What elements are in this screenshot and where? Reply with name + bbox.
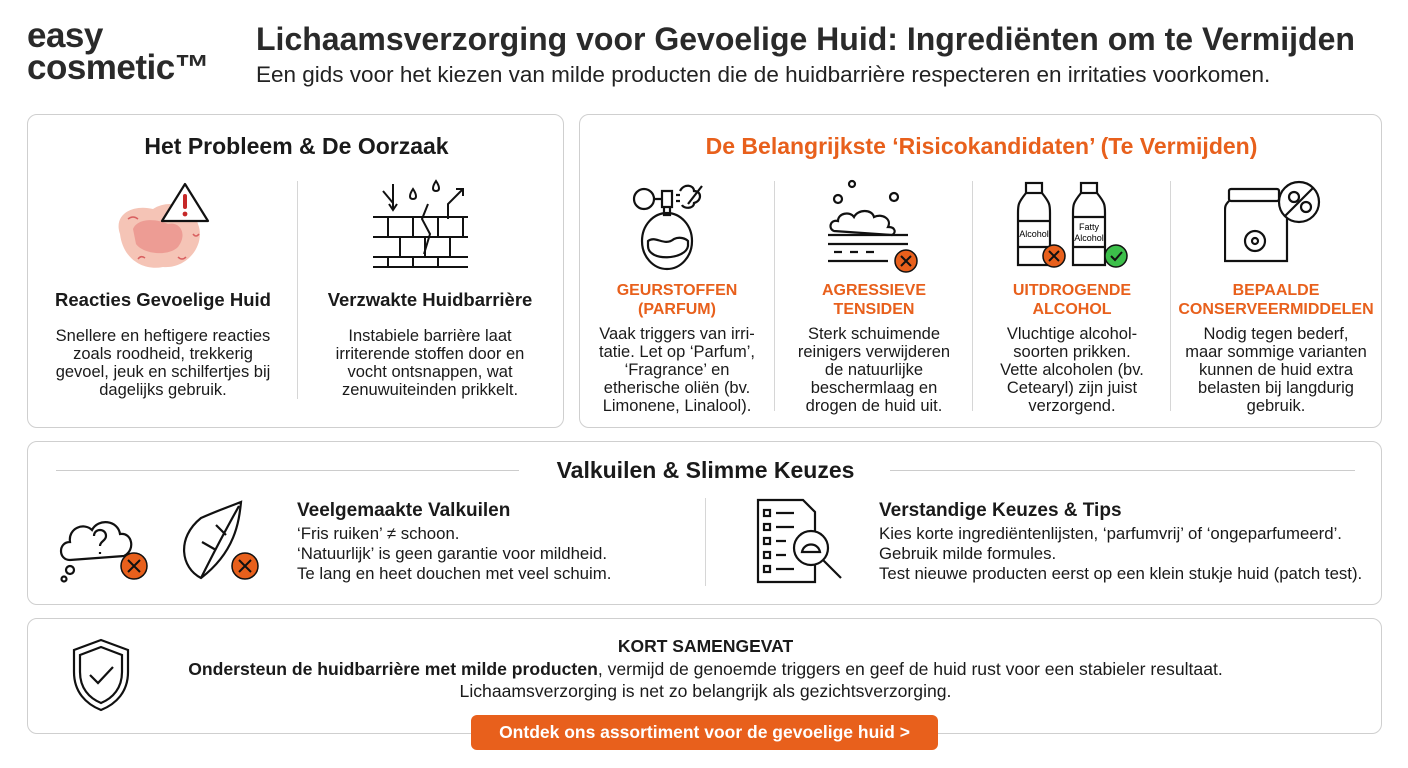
item: fragrance: (PARFUM) xyxy=(638,301,716,318)
item: alcohol: ALCOHOL xyxy=(1032,301,1112,318)
item: fragrance: Vaak triggers van irri-tatie. Let op ‘Parfum’, ‘Fragrance’ en etherische oliën (bv. Limonene, Linalool). xyxy=(599,325,755,415)
panel: pitfalls & choices xyxy=(27,441,1382,605)
icon: irritated skin xyxy=(118,182,210,268)
summary text: Lichaamsverzorging is net zo belangrijk als gezichtsverzorging. xyxy=(460,681,951,701)
icon: alcohol bottles: Alcohol xyxy=(1019,229,1049,239)
icons: pitfalls xyxy=(60,500,259,583)
item: barrier: Verzwakte Huidbarrière xyxy=(328,289,532,310)
item: surfactants xyxy=(798,282,950,415)
item: fragrance: GEURSTOFFEN xyxy=(617,282,737,299)
item: preservatives xyxy=(1178,282,1374,415)
logo: cosmetic™ xyxy=(27,48,209,87)
text: pitfalls: ‘Natuurlijk’ is geen garantie voor mildheid. xyxy=(297,544,607,563)
panel: problem & cause xyxy=(27,114,564,428)
icon: alcohol bottles: Fatty xyxy=(1079,222,1099,232)
icon: shield xyxy=(72,638,130,712)
summary text: Ondersteun de huidbarrière met milde producten, vermijd de genoemde triggers en geef de huid rust voor een stabieler resultaat. xyxy=(188,659,1223,679)
summary text: KORT SAMENGEVAT xyxy=(618,636,793,656)
text: pitfalls xyxy=(297,500,611,583)
item: preservatives: BEPAALDE xyxy=(1233,282,1319,299)
text: pitfalls: Veelgemaakte Valkuilen xyxy=(297,500,510,521)
logo xyxy=(27,16,209,87)
icon: preservatives xyxy=(1224,180,1320,262)
heading: Valkuilen & Slimme Keuzes xyxy=(557,457,854,483)
item: alcohol xyxy=(1000,282,1144,415)
text: tips xyxy=(879,500,1362,583)
item: barrier: Instabiele barrière laat irriterende stoffen door en vocht ontsnappen, wat zenuwuiteinden prikkelt. xyxy=(336,327,524,399)
summary text xyxy=(188,636,1223,701)
item: barrier xyxy=(328,289,532,399)
text: tips: Test nieuwe producten eerst op een klein stukje huid (patch test). xyxy=(879,564,1362,583)
icon: perfume xyxy=(632,184,703,270)
item: preservatives: CONSERVEERMIDDELEN xyxy=(1178,301,1374,318)
panel: summary xyxy=(27,618,1382,734)
icon: foam xyxy=(828,180,918,273)
title: Lichaamsverzorging voor Gevoelige Huid: Ingrediënten om te Vermijden xyxy=(256,21,1355,57)
heading: Het Probleem & De Oorzaak xyxy=(144,133,449,159)
item: surfactants: Sterk schuimende reinigers verwijderen de natuurlijke beschermlaag en drogen de huid uit. xyxy=(798,325,950,415)
item: fragrance xyxy=(599,282,755,415)
text: pitfalls: ‘Fris ruiken’ ≠ schoon. xyxy=(297,524,459,543)
item: reactions: Snellere en heftigere reacties zoals roodheid, trekkerig gevoel, jeuk en schilfertjes bij dagelijks gebruik. xyxy=(56,327,270,399)
heading: De Belangrijkste ‘Risicokandidaten’ (Te Vermijden) xyxy=(706,133,1257,159)
subtitle: Een gids voor het kiezen van milde producten die de huidbarrière respecteren en irritaties voorkomen. xyxy=(256,62,1270,87)
icon: checklist magnifier xyxy=(756,498,842,584)
button: call to action: Ontdek ons assortiment voor de gevoelige huid > xyxy=(499,722,910,742)
item: preservatives: Nodig tegen bederf, maar sommige varianten kunnen de huid extra belasten bij langdurig gebruik. xyxy=(1185,325,1367,415)
item: surfactants: TENSIDEN xyxy=(834,301,914,318)
icon: alcohol bottles: Alcohol xyxy=(1074,233,1104,243)
item: reactions: Reacties Gevoelige Huid xyxy=(55,289,271,310)
logo: easy xyxy=(27,16,103,55)
item: alcohol: UITDROGENDE xyxy=(1013,282,1131,299)
icon: alcohol bottles xyxy=(1016,182,1128,268)
text: tips: Kies korte ingrediëntenlijsten, ‘parfumvrij’ of ‘ongeparfumeerd’. xyxy=(879,524,1342,543)
item: reactions xyxy=(55,289,271,399)
icon: weakened barrier xyxy=(373,179,468,268)
text: pitfalls: Te lang en heet douchen met veel schuim. xyxy=(297,564,611,583)
text: tips: Verstandige Keuzes & Tips xyxy=(879,500,1122,521)
text: tips: Gebruik milde formules. xyxy=(879,544,1056,563)
item: surfactants: AGRESSIEVE xyxy=(822,282,926,299)
item: alcohol: Vluchtige alcohol-soorten prikken. Vette alcoholen (bv. Cetearyl) zijn juist verzorgend. xyxy=(1000,325,1144,415)
button: call to action xyxy=(471,715,938,750)
panel: risk candidates xyxy=(579,114,1382,428)
